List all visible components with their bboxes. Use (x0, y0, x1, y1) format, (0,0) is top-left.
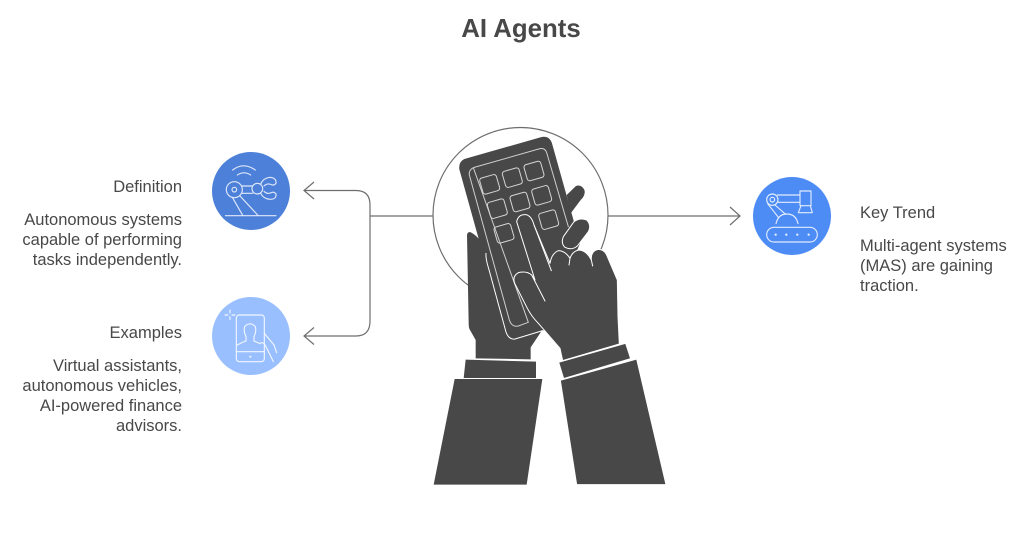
title: AI Agents (461, 15, 581, 43)
icon: person on phone (examples) (212, 297, 290, 375)
icon: factory robot conveyor (key trend) (753, 177, 831, 255)
thumb line and finger creases (532, 225, 593, 301)
text block: definition (22, 178, 182, 269)
text block: examples: Examples Virtual assistants, (53, 324, 182, 375)
text block: key trend: Key Trend Multi-agent systems (860, 204, 1007, 255)
text block: key trend (860, 204, 1007, 295)
text block: definition: capable of performing (22, 231, 182, 249)
back fingers (567, 186, 585, 213)
text block: key trend: traction. (860, 277, 919, 295)
right arm sleeve (560, 359, 666, 485)
phone edge (486, 253, 543, 339)
left hand (467, 232, 543, 359)
phone app buttons (479, 161, 559, 244)
phone (459, 137, 580, 339)
text block: examples: advisors. (116, 417, 182, 435)
central circle (433, 128, 608, 302)
illustration: hands holding phone (434, 137, 666, 485)
left cuff (464, 360, 536, 378)
text block: definition: tasks independently. (33, 251, 182, 269)
right cuff (559, 343, 631, 379)
phone screen outline (469, 148, 568, 326)
text block: examples: AI-powered finance (40, 397, 182, 415)
text block: key trend: (MAS) are gaining (860, 257, 993, 275)
icon: robotic arm (definition) (212, 152, 290, 230)
arrow: to key trend (608, 207, 740, 225)
front finger (562, 219, 590, 249)
text block: definition: Definition Autonomous systems (24, 178, 182, 229)
text block: examples: autonomous vehicles, (22, 377, 182, 395)
arrow: to definition (304, 182, 433, 216)
right hand (514, 215, 619, 361)
text block: examples (22, 324, 182, 435)
arrow: to examples (304, 216, 370, 344)
left arm sleeve (434, 379, 542, 485)
